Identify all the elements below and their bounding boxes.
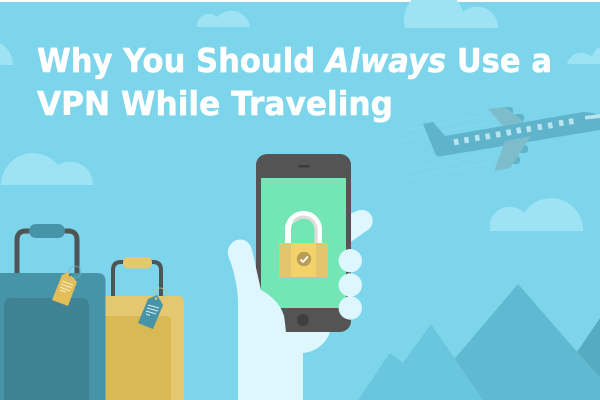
front panel xyxy=(4,298,89,400)
grip xyxy=(123,257,152,268)
padlock xyxy=(279,214,328,277)
fuselage xyxy=(423,112,600,156)
speed lines xyxy=(400,116,495,179)
title line 2: VPN While Traveling xyxy=(37,85,393,123)
engines xyxy=(503,107,528,164)
cloud: left edge xyxy=(0,40,13,65)
lock body xyxy=(279,243,328,277)
mountains xyxy=(358,284,600,400)
mountain: far right xyxy=(577,318,600,378)
windows xyxy=(454,118,574,145)
body xyxy=(106,296,184,400)
lock highlight xyxy=(291,243,316,277)
home button xyxy=(297,314,309,326)
grip xyxy=(29,224,65,238)
luggage tag: yellow xyxy=(52,266,81,306)
front panel xyxy=(106,316,171,400)
cockpit window xyxy=(585,114,600,120)
cloud: mid right xyxy=(490,198,583,231)
hand: fingers xyxy=(339,249,362,320)
suitcase: teal xyxy=(0,224,106,400)
wing: lower xyxy=(494,136,531,171)
body xyxy=(0,273,106,400)
check badge xyxy=(297,252,311,266)
mountains: small front xyxy=(358,324,483,400)
screen xyxy=(261,178,346,308)
title line 1: Why You Should Always Use a xyxy=(37,42,552,80)
shackle xyxy=(288,214,319,244)
wing: upper xyxy=(488,107,524,126)
cloud: right edge xyxy=(567,47,600,64)
airplane xyxy=(400,107,600,179)
hand: palm and thumb xyxy=(228,240,330,400)
speaker xyxy=(298,165,310,168)
hand: index finger xyxy=(345,210,373,246)
cloud: lower left xyxy=(1,153,93,185)
handle xyxy=(17,231,77,275)
cloud: top centre xyxy=(197,11,250,27)
phone body xyxy=(256,154,351,332)
phone xyxy=(256,154,351,332)
handle xyxy=(113,262,161,298)
cloud: top right xyxy=(404,0,498,28)
clouds xyxy=(0,0,600,231)
mountain: large xyxy=(440,284,600,400)
luggage tag: teal xyxy=(138,288,166,329)
suitcase: yellow xyxy=(106,257,184,400)
title xyxy=(37,42,552,123)
check mark xyxy=(300,256,308,262)
